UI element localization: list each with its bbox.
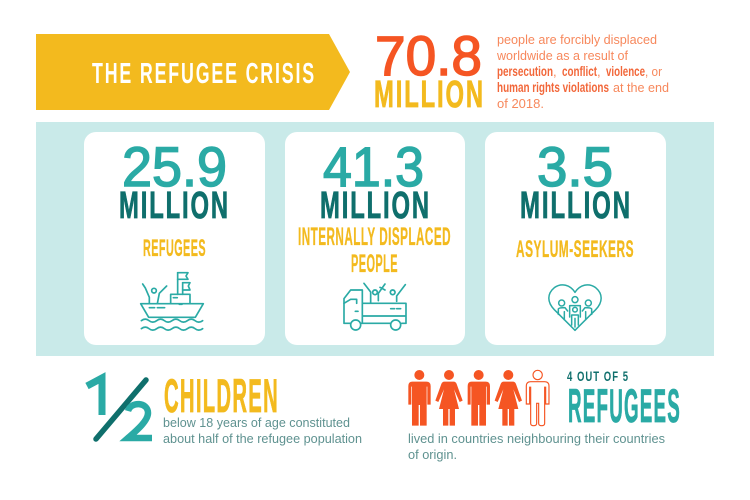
headline stat: 70.8 million — [374, 24, 485, 116]
headline description: human rights violations — [497, 80, 609, 95]
stat: one half children — [87, 369, 362, 446]
icon: boat — [141, 273, 203, 330]
card: asylum-seekers: ASYLUM-SEEKERS — [516, 236, 634, 263]
headline description: violence — [606, 64, 645, 79]
icon: row of five people — [408, 370, 549, 426]
icon: truck — [344, 283, 406, 330]
card: asylum-seekers: MILLION — [520, 185, 632, 227]
panel: teal band — [36, 122, 714, 356]
stat: one half children: CHILDREN — [164, 369, 279, 422]
stat: one half children: about half of the refugee population — [163, 431, 362, 446]
headline stat: 70.8 million: 70.8 — [375, 24, 482, 87]
card: refugees: REFUGEES — [143, 235, 206, 262]
headline description: worldwide as a result of — [496, 48, 628, 63]
card: internally displaced people: MILLION — [320, 185, 431, 227]
headline description: conflict — [562, 64, 597, 79]
card: refugees: 25.9 — [122, 135, 227, 198]
card: internally displaced people — [285, 132, 465, 345]
icon: heart with family — [549, 285, 601, 330]
stat: four out of five refugees: lived in countries neighbouring their countries — [408, 431, 665, 446]
headline description: at the end — [613, 80, 669, 95]
card: refugees: MILLION — [119, 185, 230, 227]
card: refugees — [84, 132, 265, 345]
headline description: people are forcibly displaced — [497, 32, 657, 47]
stat: four out of five refugees: 4 OUT OF 5 — [567, 368, 629, 384]
headline stat: 70.8 million: MILLION — [374, 74, 485, 116]
title banner — [36, 34, 350, 110]
headline description: persecution — [497, 64, 553, 79]
stat: four out of five refugees: of origin. — [408, 447, 457, 462]
stat: four out of five refugees — [408, 368, 681, 462]
card: asylum-seekers — [485, 132, 666, 345]
headline description: of 2018. — [497, 96, 544, 111]
stat: one half children: below 18 years of age constituted — [163, 415, 350, 430]
card: internally displaced people: 41.3 — [323, 135, 424, 198]
headline description: , — [597, 64, 601, 79]
card: internally displaced people: PEOPLE — [351, 250, 398, 278]
card: internally displaced people: INTERNALLY DISPLACED — [298, 223, 451, 251]
headline description: , or — [645, 64, 663, 79]
title banner: THE REFUGEE CRISIS — [92, 58, 316, 90]
card: asylum-seekers: 3.5 — [537, 135, 613, 198]
fraction one half — [87, 378, 152, 439]
headline description — [496, 32, 669, 111]
headline description: , — [553, 64, 557, 79]
